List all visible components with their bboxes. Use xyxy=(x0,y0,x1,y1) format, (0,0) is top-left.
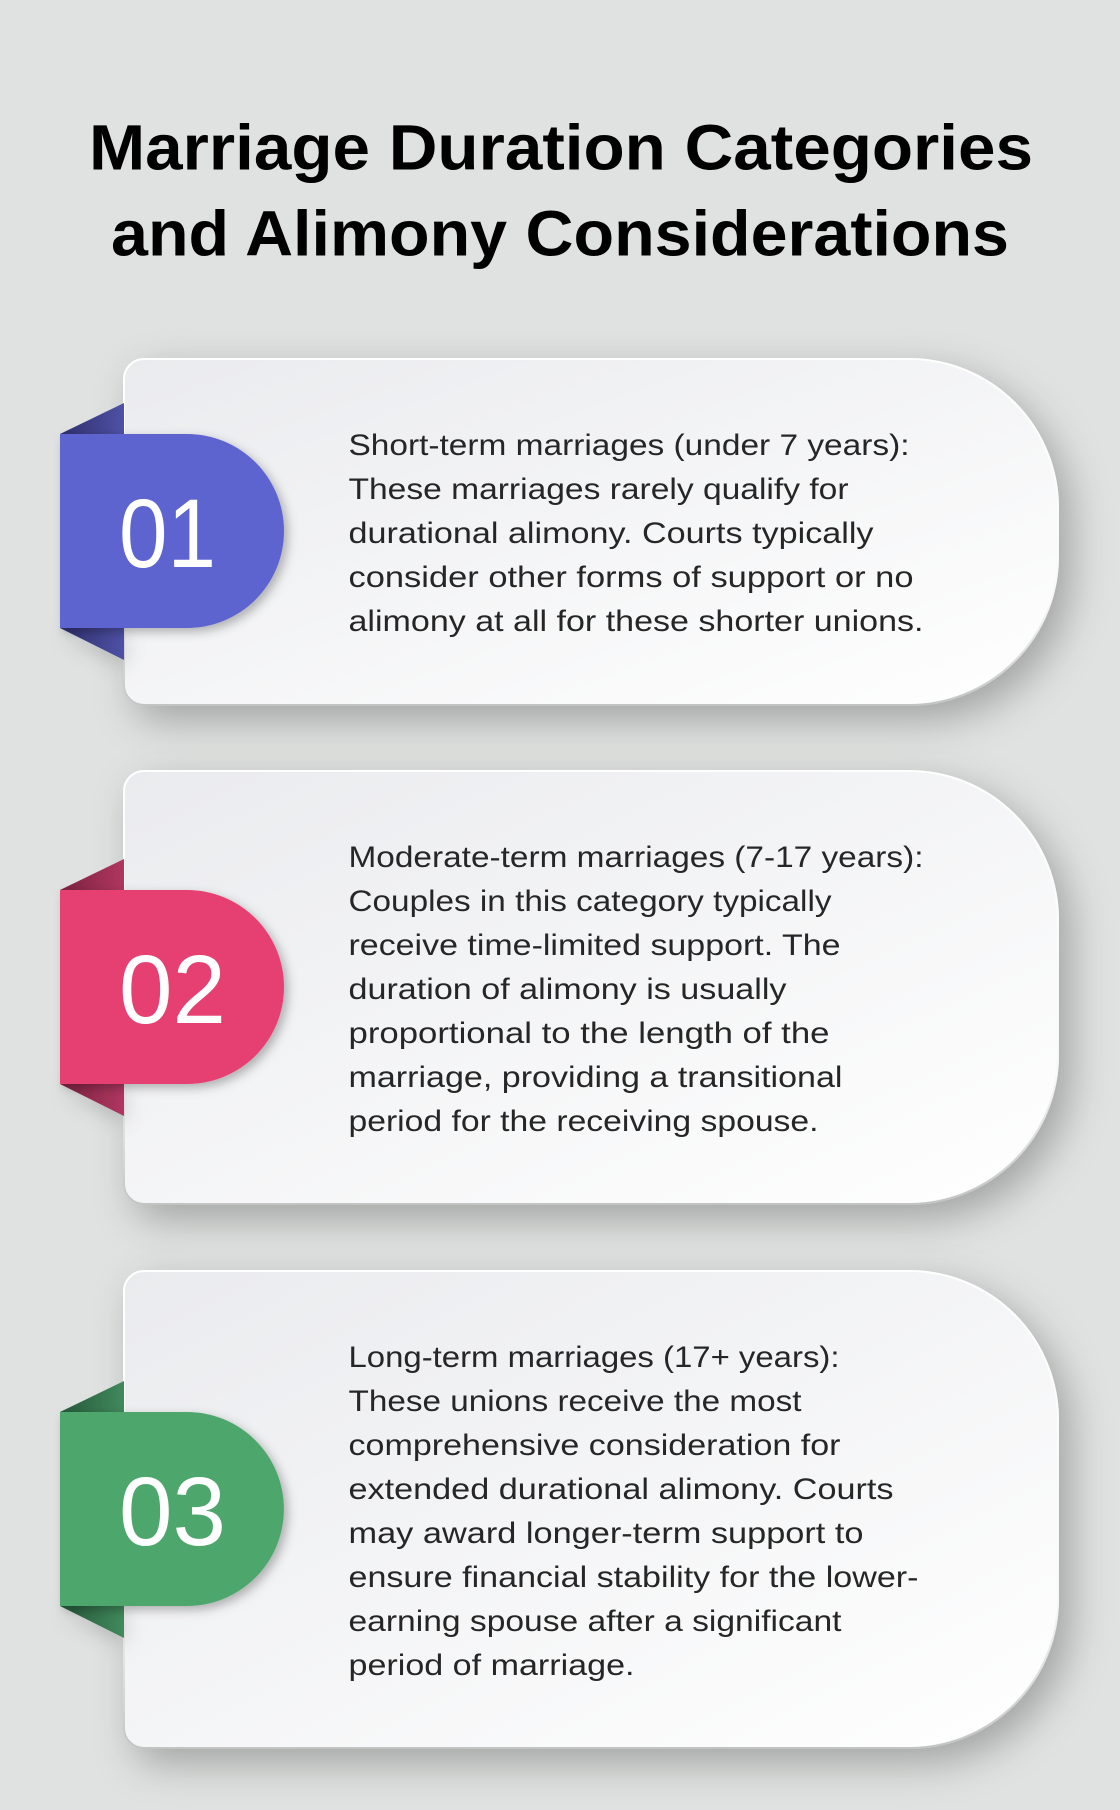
card 3 background xyxy=(124,1271,1058,1748)
text block 2: receive time-limited support. The xyxy=(348,929,840,962)
text block 3: Long-term marriages (17+ years): xyxy=(348,1341,840,1374)
card 1 background xyxy=(124,359,1058,705)
number 02: 02 xyxy=(119,935,226,1044)
text block 2: proportional to the length of the xyxy=(348,1017,830,1050)
text block 2: period for the receiving spouse. xyxy=(348,1105,818,1138)
text block 1: These marriages rarely qualify for xyxy=(348,473,849,506)
number badge 1 xyxy=(60,434,284,628)
text block 1: consider other forms of support or no xyxy=(348,561,914,594)
text block 3: earning spouse after a significant xyxy=(348,1605,842,1638)
text block 1: alimony at all for these shorter unions. xyxy=(348,605,924,638)
title xyxy=(89,112,1033,270)
text block 3: period of marriage. xyxy=(348,1649,634,1682)
text block 2: Couples in this category typically xyxy=(348,885,832,918)
text block 3: extended durational alimony. Courts xyxy=(348,1473,894,1506)
text block 3 xyxy=(348,1341,918,1682)
text block 1: durational alimony. Courts typically xyxy=(348,517,874,550)
number 03: 03 xyxy=(119,1457,226,1566)
ribbon folds 1 xyxy=(60,403,124,660)
ribbon folds 3 xyxy=(60,1381,124,1638)
text block 3: These unions receive the most xyxy=(348,1385,802,1418)
panel: moderate-term marriages xyxy=(60,771,1058,1204)
panel: short-term marriages xyxy=(60,359,1058,705)
number 01: 01 xyxy=(119,479,216,588)
text block 2: marriage, providing a transitional xyxy=(348,1061,842,1094)
text block 2: duration of alimony is usually xyxy=(348,973,787,1006)
number badge 2 xyxy=(60,890,284,1084)
text block 3: comprehensive consideration for xyxy=(348,1429,841,1462)
text block 3: may award longer-term support to xyxy=(348,1517,864,1550)
text block 2: Moderate-term marriages (7-17 years): xyxy=(348,841,924,874)
text block 2 xyxy=(348,841,924,1138)
text block 1 xyxy=(348,429,924,638)
card 2 background xyxy=(124,771,1058,1204)
title: and Alimony Considerations xyxy=(111,198,1009,270)
number badge 3 xyxy=(60,1412,284,1606)
panel: long-term marriages xyxy=(60,1271,1058,1748)
text block 1: Short-term marriages (under 7 years): xyxy=(348,429,910,462)
title: Marriage Duration Categories xyxy=(89,112,1033,184)
ribbon folds 2 xyxy=(60,859,124,1116)
text block 3: ensure financial stability for the lower- xyxy=(348,1561,918,1594)
